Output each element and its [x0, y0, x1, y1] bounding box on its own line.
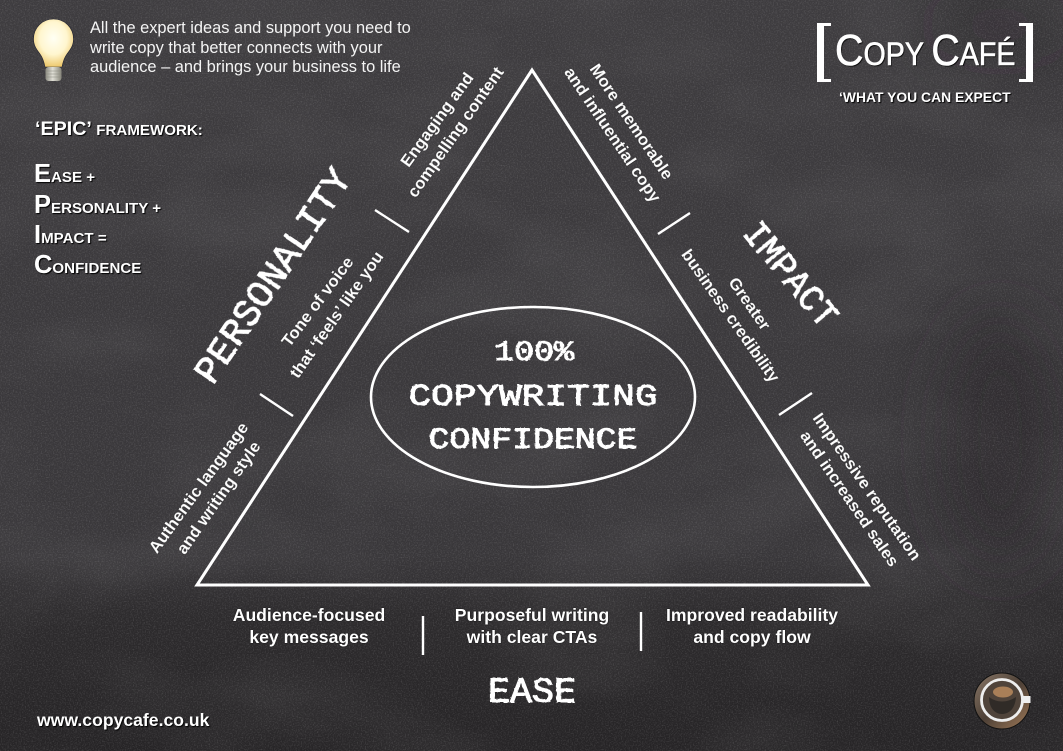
label: memorable copy: and influential copy	[560, 64, 665, 206]
central ellipse	[371, 307, 695, 487]
heading: ease: EASE	[488, 673, 576, 713]
icon: coffee cup	[974, 673, 1030, 729]
divider ticks	[260, 210, 812, 655]
list row: ease: EASE +	[34, 160, 95, 188]
logo right bracket	[1019, 23, 1033, 82]
label: engaging content: Engaging and	[397, 69, 478, 170]
centre chalk text: 100% copywriting confidence: 100%	[494, 338, 574, 369]
heading: EPIC framework: ‘EPIC’ FRAMEWORK:	[35, 118, 203, 140]
label: tone of voice: Tone of voice	[278, 253, 358, 350]
logo left bracket	[817, 23, 831, 82]
label: purposeful writing: Purposeful writing	[455, 605, 609, 625]
label: improved readability: and copy flow	[693, 627, 811, 647]
label: authentic language: and writing style	[173, 438, 265, 558]
centre chalk text: 100% copywriting confidence: COPYWRITING	[408, 380, 658, 415]
label: purposeful writing: with clear CTAs	[466, 627, 598, 647]
logo: Copy Café	[817, 23, 1033, 82]
label: improved readability: Improved readability	[666, 605, 838, 625]
icon: light bulb	[34, 19, 74, 81]
website: www.copycafe.co.uk	[37, 710, 209, 730]
intro text: All the expert ideas and support you need to	[90, 19, 411, 37]
label: reputation and sales: Impressive reputation	[809, 409, 925, 564]
label: improved readability	[666, 605, 838, 647]
label: reputation and sales: and increased sales	[796, 427, 903, 570]
label: audience-focused: key messages	[249, 627, 369, 647]
list row: impact: IMPACT =	[34, 220, 107, 248]
centre chalk text: 100% copywriting confidence: CONFIDENCE	[428, 424, 638, 458]
label: authentic language: Authentic language	[145, 419, 252, 557]
framework list	[34, 160, 162, 278]
heading: impact: IMPACT	[733, 214, 845, 337]
label: credibility: business credibility	[677, 246, 784, 386]
label: engaging content: compelling content	[403, 63, 508, 201]
label: audience-focused	[233, 605, 385, 647]
centre chalk text: 100% copywriting confidence	[408, 338, 658, 458]
intro text: audience – and brings your business to life	[90, 58, 401, 76]
list row: personality: PERSONALITY +	[34, 190, 161, 218]
tagline: ‘WHAT YOU CAN EXPECT	[839, 89, 1011, 105]
list row: confidence: CONFIDENCE	[34, 250, 141, 278]
heading: personality: PERSONALITY	[187, 161, 363, 393]
intro text	[90, 19, 411, 76]
label: audience-focused: Audience-focused	[233, 605, 385, 625]
label: credibility: Greater	[724, 274, 775, 334]
label: tone of voice: that ‘feels’ like you	[286, 248, 387, 382]
triangle	[197, 70, 868, 585]
label: purposeful writing	[455, 605, 609, 647]
intro text: write copy that better connects with your	[90, 39, 382, 57]
label: memorable copy: More memorable	[586, 60, 677, 183]
logo wordmark: COPY CAFÉ	[835, 26, 1016, 75]
